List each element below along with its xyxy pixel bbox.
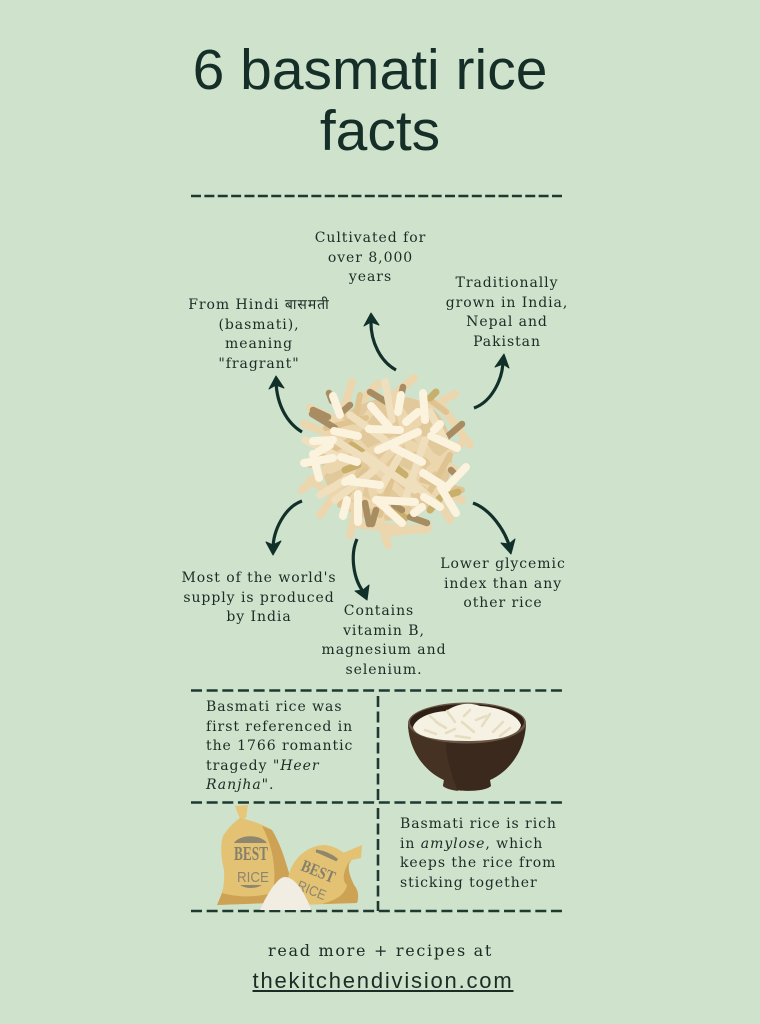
arrow: to vitamin fact bbox=[353, 539, 369, 600]
icon: bowl of rice bbox=[408, 702, 526, 791]
fact: cultivated: years bbox=[349, 269, 392, 285]
fact: heer ranjha: tragedy "Heer bbox=[206, 758, 320, 774]
fact: traditionally grown: Nepal and bbox=[466, 314, 548, 330]
fact: vitamins bbox=[322, 603, 446, 678]
arrow: to cultivated fact bbox=[364, 313, 396, 370]
arrow: to world supply fact bbox=[266, 501, 302, 555]
title bbox=[193, 38, 547, 163]
fact: glycemic index: other rice bbox=[463, 595, 543, 611]
fact: vitamins: Contains bbox=[344, 603, 414, 619]
fact: hindi origin: From Hindi बासमती bbox=[188, 296, 330, 313]
icon: standing sack: BEST bbox=[234, 843, 268, 865]
footer: website link: thekitchendivision.com bbox=[253, 968, 513, 993]
fact: glycemic index bbox=[440, 556, 566, 611]
fact: traditionally grown: Pakistan bbox=[473, 334, 541, 350]
fact: amylose: keeps the rice from bbox=[400, 855, 556, 871]
fact: amylose: Basmati rice is rich bbox=[400, 816, 557, 832]
fact: hindi origin: "fragrant" bbox=[218, 356, 300, 372]
arrows bbox=[266, 313, 515, 600]
fact: heer ranjha: first referenced in bbox=[206, 718, 353, 734]
fact: cultivated bbox=[315, 230, 426, 285]
fact: world supply: Most of the world's bbox=[181, 570, 337, 586]
fact: cultivated: over 8,000 bbox=[328, 250, 413, 266]
fact: amylose: in amylose, which bbox=[400, 836, 543, 852]
fact: vitamins: vitamin B, bbox=[343, 622, 425, 638]
title: facts bbox=[320, 99, 440, 163]
fact: heer ranjha: Ranjha". bbox=[206, 777, 274, 793]
fact: hindi origin: meaning bbox=[225, 336, 293, 352]
icon: leaning sack: BEST bbox=[299, 856, 339, 887]
fact: traditionally grown: Traditionally bbox=[456, 275, 558, 291]
fact: amylose: sticking together bbox=[400, 874, 538, 890]
icon: leaning sack bbox=[288, 845, 362, 905]
icon: leaning sack: RICE bbox=[295, 877, 329, 903]
fact: heer ranjha bbox=[206, 699, 353, 793]
fact: heer ranjha: the 1766 romantic bbox=[206, 738, 353, 754]
fact: amylose bbox=[400, 816, 557, 890]
rice pile bbox=[302, 378, 470, 545]
arrow: to glycemic fact bbox=[473, 503, 515, 554]
arrow: to traditionally grown fact bbox=[474, 354, 509, 408]
title: 6 basmati rice bbox=[193, 38, 547, 102]
fact: heer ranjha: Basmati rice was bbox=[206, 699, 342, 715]
fact: hindi origin bbox=[188, 296, 330, 372]
icon: rice pile bbox=[260, 877, 311, 910]
arrow: to Hindi origin fact bbox=[269, 376, 302, 432]
fact: vitamins: selenium. bbox=[345, 662, 423, 678]
fact: traditionally grown: grown in India, bbox=[446, 294, 568, 310]
fact: traditionally grown bbox=[446, 275, 568, 350]
fact: glycemic index: Lower glycemic bbox=[440, 556, 566, 572]
footer: read more: read more + recipes at bbox=[268, 941, 493, 960]
icon: rice sacks bbox=[217, 805, 362, 910]
icon: standing sack bbox=[217, 805, 292, 905]
fact: glycemic index: index than any bbox=[444, 576, 562, 592]
icon: standing sack: RICE bbox=[237, 869, 269, 886]
fact: world supply: by India bbox=[226, 609, 292, 625]
fact: hindi origin: (basmati), bbox=[218, 316, 300, 332]
fact: cultivated: Cultivated for bbox=[315, 230, 426, 246]
fact: world supply bbox=[181, 570, 337, 625]
fact: vitamins: magnesium and bbox=[322, 642, 446, 658]
fact: world supply: supply is produced bbox=[183, 590, 335, 606]
